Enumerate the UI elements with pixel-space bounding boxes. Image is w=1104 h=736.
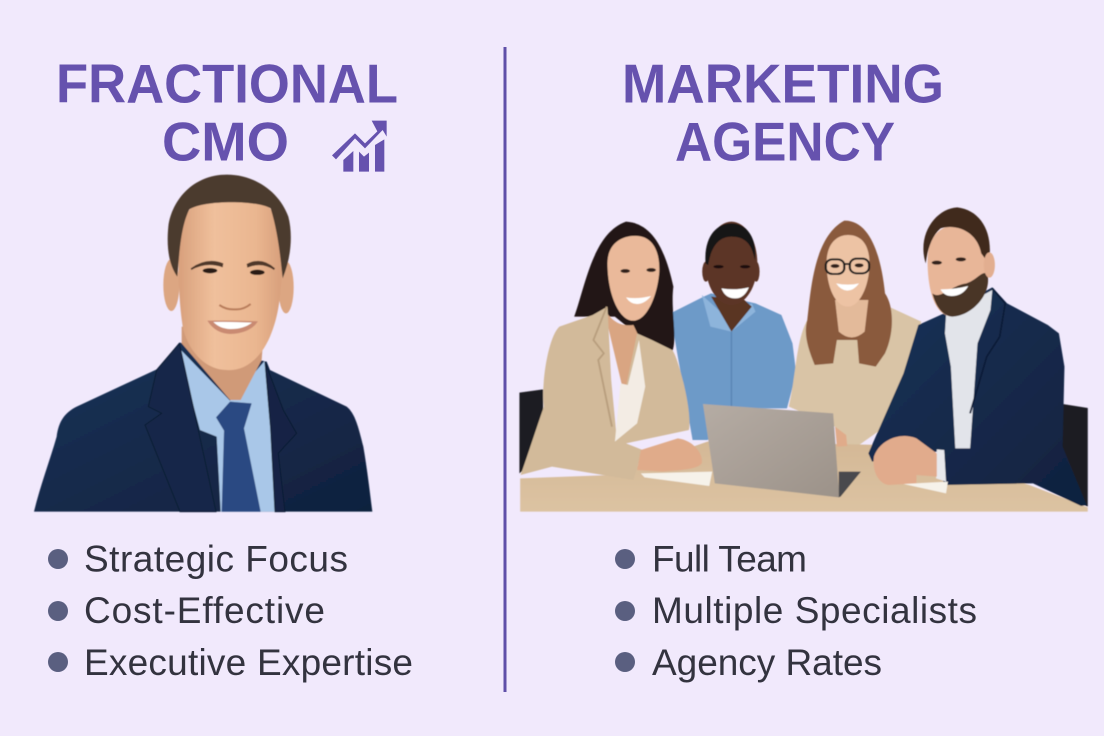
shirt collar and front: [178, 347, 275, 512]
heading: Marketing Agency: AGENCY: [675, 110, 895, 172]
heading: Fractional CMO: [56, 52, 398, 172]
chairs: [519, 389, 543, 473]
laptop: [703, 404, 861, 497]
nose: [219, 304, 251, 309]
right lapel: [265, 362, 297, 512]
tie: [216, 402, 261, 512]
paper on table: [641, 472, 712, 486]
bullet: Full Team: Full Team: [652, 538, 807, 580]
heading: Fractional CMO: FRACTIONAL: [56, 52, 398, 114]
portrait: executive in navy suit: [34, 175, 372, 512]
bullet: Strategic Focus: Strategic Focus: [84, 538, 348, 580]
table top: [520, 442, 1088, 512]
icon: growth chart with arrow: [332, 121, 387, 172]
heading: Marketing Agency: MARKETING: [622, 52, 944, 114]
left lapel: [145, 343, 216, 512]
bullet list: Marketing Agency: [615, 538, 977, 683]
bullet: Cost-Effective: Cost-Effective: [84, 590, 325, 631]
left panel: Fractional CMO: [34, 52, 413, 683]
neck: [182, 327, 263, 400]
person: woman in beige blazer: [521, 222, 702, 480]
eyes: [203, 268, 217, 273]
bullet list: Fractional CMO: [48, 538, 413, 683]
right panel: Marketing Agency: [519, 52, 1088, 683]
paper under hand: [904, 482, 948, 493]
bullet: Multiple Specialists: Multiple Specialists: [652, 590, 977, 631]
person: man in blue shirt: [670, 222, 796, 440]
eyebrows: [191, 261, 223, 270]
heading: Fractional CMO: CMO: [162, 110, 289, 172]
face: [178, 193, 282, 370]
person: man in navy blazer: [868, 207, 1087, 506]
bullet: Executive Expertise: Executive Expertise: [84, 642, 413, 683]
hair: [168, 175, 291, 278]
center divider: [504, 47, 506, 692]
heading: Marketing Agency: [622, 52, 944, 172]
person: woman with glasses: [789, 221, 921, 447]
smile: [207, 320, 258, 334]
hand behind laptop: [835, 427, 847, 447]
bullet: Agency Rates: Agency Rates: [652, 642, 882, 683]
photo: agency team at a table: [519, 207, 1088, 512]
ears: [163, 259, 179, 311]
suit jacket: [34, 343, 372, 512]
